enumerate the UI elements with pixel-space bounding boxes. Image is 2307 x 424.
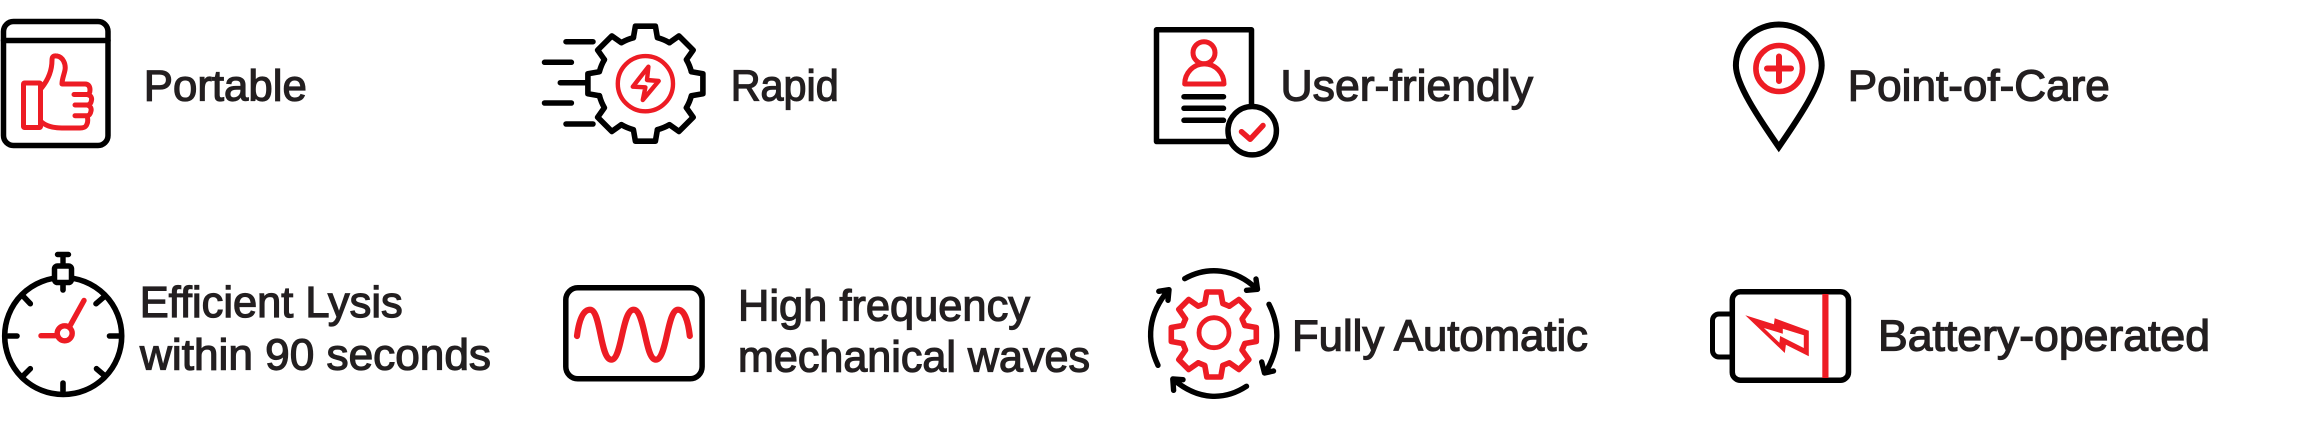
label: Efficient Lysis within 90 seconds: within 90 seconds xyxy=(139,332,491,380)
label: Efficient Lysis within 90 seconds: Efficient Lysis xyxy=(140,279,403,327)
label: Rapid: Rapid xyxy=(731,63,839,111)
icon: profile document with check xyxy=(1156,30,1276,155)
feature: Rapid xyxy=(544,26,839,141)
label: User-friendly: User-friendly xyxy=(1280,63,1533,111)
feature: High frequency mechanical waves xyxy=(566,282,1090,381)
label: High frequency mechanical waves: High frequency xyxy=(738,282,1030,330)
label: Fully Automatic: Fully Automatic xyxy=(1292,313,1588,361)
icon: map pin with medical cross xyxy=(1736,24,1822,147)
feature: Point-of-Care xyxy=(1736,24,2110,147)
icon: sine wave in rounded frame xyxy=(566,288,702,379)
label: Battery-operated: Battery-operated xyxy=(1878,313,2210,361)
feature: Portable xyxy=(4,22,307,146)
label: High frequency mechanical waves xyxy=(738,282,1090,381)
icon: stopwatch xyxy=(5,254,122,394)
feature: User-friendly xyxy=(1156,30,1533,155)
feature: Fully Automatic xyxy=(1151,271,1588,396)
label: High frequency mechanical waves: mechanical waves xyxy=(738,333,1090,381)
icon: gear with speed lines and bolt xyxy=(544,26,703,141)
label: Portable: Portable xyxy=(144,63,307,111)
icon: thumbs up on device xyxy=(4,22,108,146)
feature: Efficient Lysis within 90 seconds xyxy=(5,254,491,394)
label: Point-of-Care: Point-of-Care xyxy=(1848,63,2110,111)
icon: battery with lightning bolt xyxy=(1712,292,1848,380)
icon: red gear with cycling arrows xyxy=(1151,271,1277,396)
feature: Battery-operated xyxy=(1712,292,2210,380)
label: Efficient Lysis within 90 seconds xyxy=(139,279,491,380)
